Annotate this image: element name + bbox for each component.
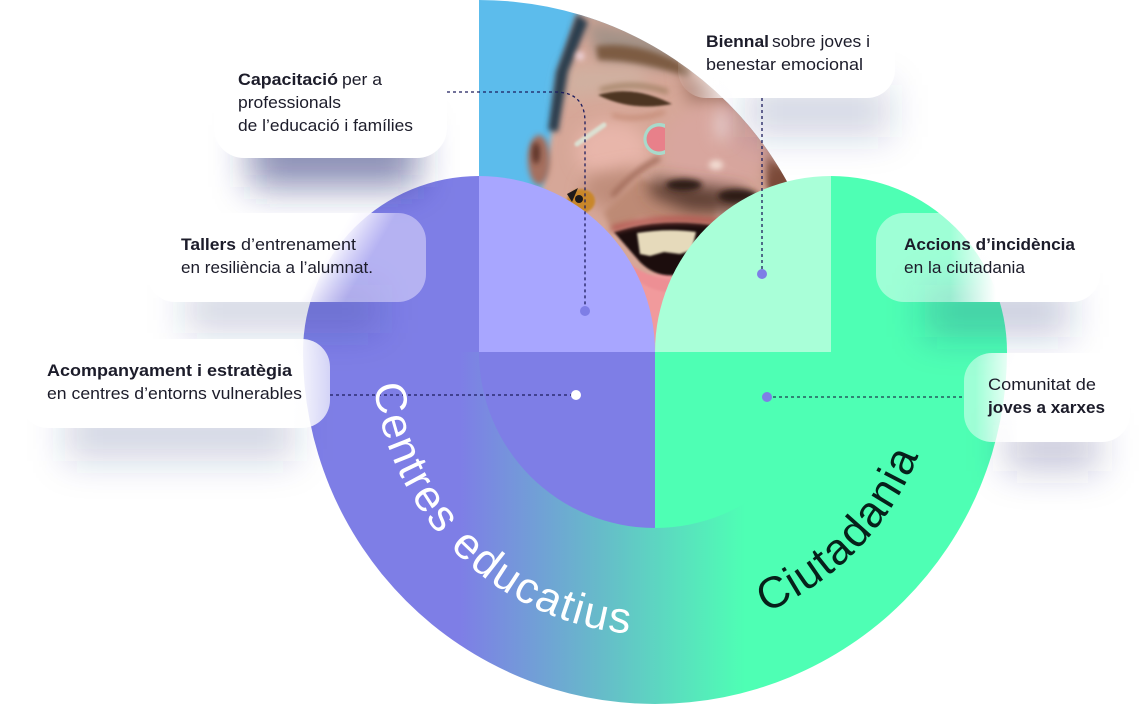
dot: Biennal — [757, 269, 767, 279]
card: Biennal: benestar emocional — [706, 56, 863, 74]
card: Biennal: sobre joves i — [772, 33, 870, 51]
card shadows — [65, 85, 1100, 471]
card: Accions — [876, 213, 1100, 302]
card: Capacitació: Capacitació — [238, 71, 338, 89]
panel: inner purple quarter — [479, 352, 655, 528]
card: Tallers: d’entrenament — [241, 236, 356, 254]
curved label: Centres educatius: Centres educatius — [376, 384, 630, 633]
panel: left upper purple quarter — [303, 176, 479, 352]
card: Capacitació: professionals — [238, 94, 341, 112]
card: Capacitació — [214, 50, 447, 158]
card: Acompanyament: en centres d’entorns vulnerables — [47, 385, 302, 403]
card: Comunitat: Comunitat de — [988, 376, 1096, 394]
dot: Comunitat — [762, 392, 772, 402]
card: Biennal: Biennal — [706, 33, 769, 51]
ring: large half circle with purple to green gradient — [303, 352, 1007, 704]
panel: left light lilac quarter — [479, 176, 655, 352]
card: Comunitat — [964, 353, 1130, 442]
panel: inner green quarter — [655, 352, 831, 528]
card: Accions: Accions d’incidència — [904, 236, 1076, 254]
card: Comunitat: joves a xarxes — [987, 399, 1105, 417]
card: Tallers: Tallers — [181, 236, 236, 254]
card: Capacitació: de l’educació i famílies — [238, 117, 413, 135]
panel: right upper green quarter — [831, 176, 1007, 352]
dashed connector: Acompanyament — [330, 394, 576, 396]
card: Capacitació: per a — [342, 71, 383, 89]
photo: laughing young person with stickers — [479, 0, 787, 350]
card: Acompanyament — [20, 339, 330, 428]
card: Acompanyament: Acompanyament i estratègia — [47, 362, 293, 380]
panel: right light mint quarter — [655, 176, 831, 352]
dashed connector: Biennal — [761, 98, 763, 273]
card: Tallers — [147, 213, 426, 302]
dot: Acompanyament — [571, 390, 581, 400]
dot: Capacitació — [580, 306, 590, 316]
dashed connector: Capacitació — [447, 92, 585, 311]
dashed connector: Comunitat — [767, 396, 964, 398]
card: Accions: en la ciutadania — [904, 259, 1026, 277]
card: Tallers: en resiliència a l’alumnat. — [181, 259, 373, 277]
curved label: Ciutadania: Ciutadania — [758, 451, 918, 608]
card: Biennal — [678, 8, 895, 98]
